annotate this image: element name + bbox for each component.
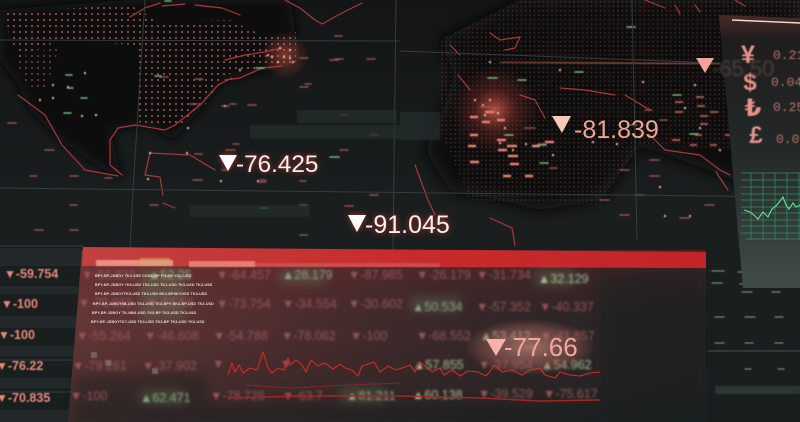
value: -77.66	[504, 332, 578, 362]
card body	[719, 15, 800, 288]
table values (blurred): ▼	[280, 357, 292, 371]
dot grid: Eurasia	[440, 0, 800, 205]
table values (blurred): ▼-41.857	[540, 329, 595, 343]
table values (blurred): ▲81.211	[346, 389, 396, 403]
dot grid: North America west	[15, 45, 60, 90]
glow: Europe	[451, 66, 539, 154]
currency values	[771, 48, 800, 147]
panel: currency side card	[719, 15, 800, 288]
value: -81.839	[574, 116, 659, 144]
white order list: BPY-BP-JDBOY6B-USD TK3-USD TK3-BPY BK3-BP-USD TK3-USD	[93, 302, 214, 306]
table values (blurred): ▲50.534	[412, 300, 463, 314]
table values (blurred): ▼-78.726	[210, 389, 265, 403]
bright data blocks: Europe and Middle East	[468, 112, 554, 176]
white order list	[91, 274, 214, 324]
table values (blurred): ▼	[212, 357, 224, 371]
table values (blurred): ▼-66.833	[81, 268, 136, 282]
white order list: BPY-BP-JDBOY TK3 ASE CODE-BP PH-BN VOL-USD	[95, 274, 192, 278]
table values (blurred): ▼-57.352	[476, 300, 531, 314]
value row 2: ▼-100	[1, 297, 38, 311]
right bottom grey band	[715, 386, 800, 394]
currency values: 0.0	[776, 132, 799, 147]
table values (blurred): ▼-31.734	[476, 268, 531, 282]
glow: New York	[261, 31, 309, 79]
currency symbols: $	[743, 69, 757, 96]
table values (blurred): ▲54.962	[541, 358, 592, 372]
table values (blurred): ▼-78.062	[281, 329, 336, 343]
table values (blurred): ▼-40.337	[539, 300, 594, 314]
dot grid: North America	[5, 5, 296, 125]
header highlight segments	[96, 258, 440, 267]
label: -77.66 with glow	[464, 319, 596, 375]
chart grid	[741, 173, 800, 240]
table values (blurred): ▲52.25	[148, 268, 192, 282]
dark vertical blur bands	[75, 270, 706, 422]
panel header bar	[82, 247, 706, 268]
table values (blurred): ▼-55.264	[76, 329, 131, 343]
table values (blurred): ▼-100	[70, 389, 107, 403]
land masses: Eurasia and Africa	[425, 0, 800, 210]
table values (blurred): ▼-37.954	[478, 358, 533, 372]
latitude streak: Eurasia	[500, 62, 720, 64]
table values (blurred): ▼-26.179	[416, 268, 471, 282]
green glow patches	[140, 270, 575, 404]
east Asia data blocks	[672, 97, 738, 145]
marker: triangle only	[696, 58, 714, 73]
glow patch	[464, 319, 596, 375]
left data column background	[0, 248, 82, 422]
label: -81.839	[552, 116, 659, 144]
value: -76.425	[236, 151, 318, 178]
table values (blurred): ▼-34.554	[282, 297, 337, 311]
land masses: North America	[0, 0, 300, 178]
chart line	[744, 197, 800, 219]
white order list: BPY-BP-JDBOYTK7-USD TK3-USD TK3-BP TK3-USD TK3-USD	[91, 320, 205, 324]
white order list: BPY-BP-JDBOYTK9-USD TK3-USD BK3-BPSKYUSD TK3-USD	[95, 292, 207, 296]
table values (blurred): ▲53.412	[480, 329, 531, 343]
left column values	[0, 267, 58, 405]
label: -76.425	[219, 151, 318, 178]
currency symbols: £	[749, 122, 763, 149]
table values (blurred): ▼-39.529	[478, 387, 533, 401]
faint overlap label: -65.50	[712, 56, 774, 81]
table values (blurred): ▼-37.902	[142, 359, 197, 373]
small squares	[91, 352, 158, 374]
card top highlight	[732, 20, 800, 23]
marker	[552, 116, 571, 133]
right side faint data rows	[708, 271, 800, 369]
table values (blurred): ▲32.129	[538, 272, 589, 286]
barcode strip	[753, 276, 798, 282]
table values (blurred): ▲60.138	[412, 388, 463, 402]
table values (blurred): ▼-70.869	[78, 296, 133, 310]
panel: red data table	[68, 247, 706, 422]
white order list: BPY-BP-JDBOY 7K9-USD TK3-USD TK1-USD TK3-USD TK3-USD	[95, 283, 213, 287]
green line chart	[741, 173, 800, 240]
currency symbols: ₺	[745, 94, 762, 122]
table values (blurred): ▼-100	[350, 329, 387, 343]
table values (blurred): ▼-54.788	[213, 329, 268, 343]
currency symbols: ¥	[741, 41, 755, 69]
marker	[348, 215, 366, 232]
panel vertical tint	[68, 250, 706, 422]
table values (blurred): ▲28.179	[282, 268, 333, 282]
value row 1: ▼-59.754	[4, 267, 58, 281]
table values (blurred): ▼-79.261	[72, 359, 127, 373]
marker	[219, 155, 237, 171]
coastlines	[18, 0, 745, 245]
table values (blurred): ▲62.471	[140, 391, 191, 405]
small data labels: green	[64, 1, 698, 208]
table values (blurred): ▼-55.56	[146, 296, 194, 310]
bright city markers	[40, 48, 720, 216]
value: -91.045	[365, 211, 450, 239]
grey data strips	[190, 110, 440, 217]
white order list: BPY-BP-JDBOY TK-NBK-USD TK3-BP TK3-USD TK3-USD	[92, 311, 197, 315]
panel body	[68, 250, 706, 422]
table values (blurred)	[70, 268, 598, 405]
table values (blurred): ▼-68.552	[416, 329, 471, 343]
small data labels: light	[8, 36, 714, 235]
table values (blurred): ▼-30.602	[348, 297, 403, 311]
marker	[486, 339, 506, 356]
table values (blurred): ▼-46.608	[144, 329, 199, 343]
table values (blurred): ▼-75.617	[543, 387, 598, 401]
table values (blurred): ▲57.855	[413, 358, 464, 372]
table values (blurred): ▼-63.7	[282, 389, 323, 403]
table values (blurred): ▼-73.754	[216, 297, 271, 311]
red line chart	[228, 352, 600, 401]
table values (blurred): ▼-64.457	[216, 268, 271, 282]
table values (blurred): ▼-87.985	[348, 268, 403, 282]
currency symbols	[741, 41, 763, 149]
label: -91.045	[348, 211, 450, 239]
